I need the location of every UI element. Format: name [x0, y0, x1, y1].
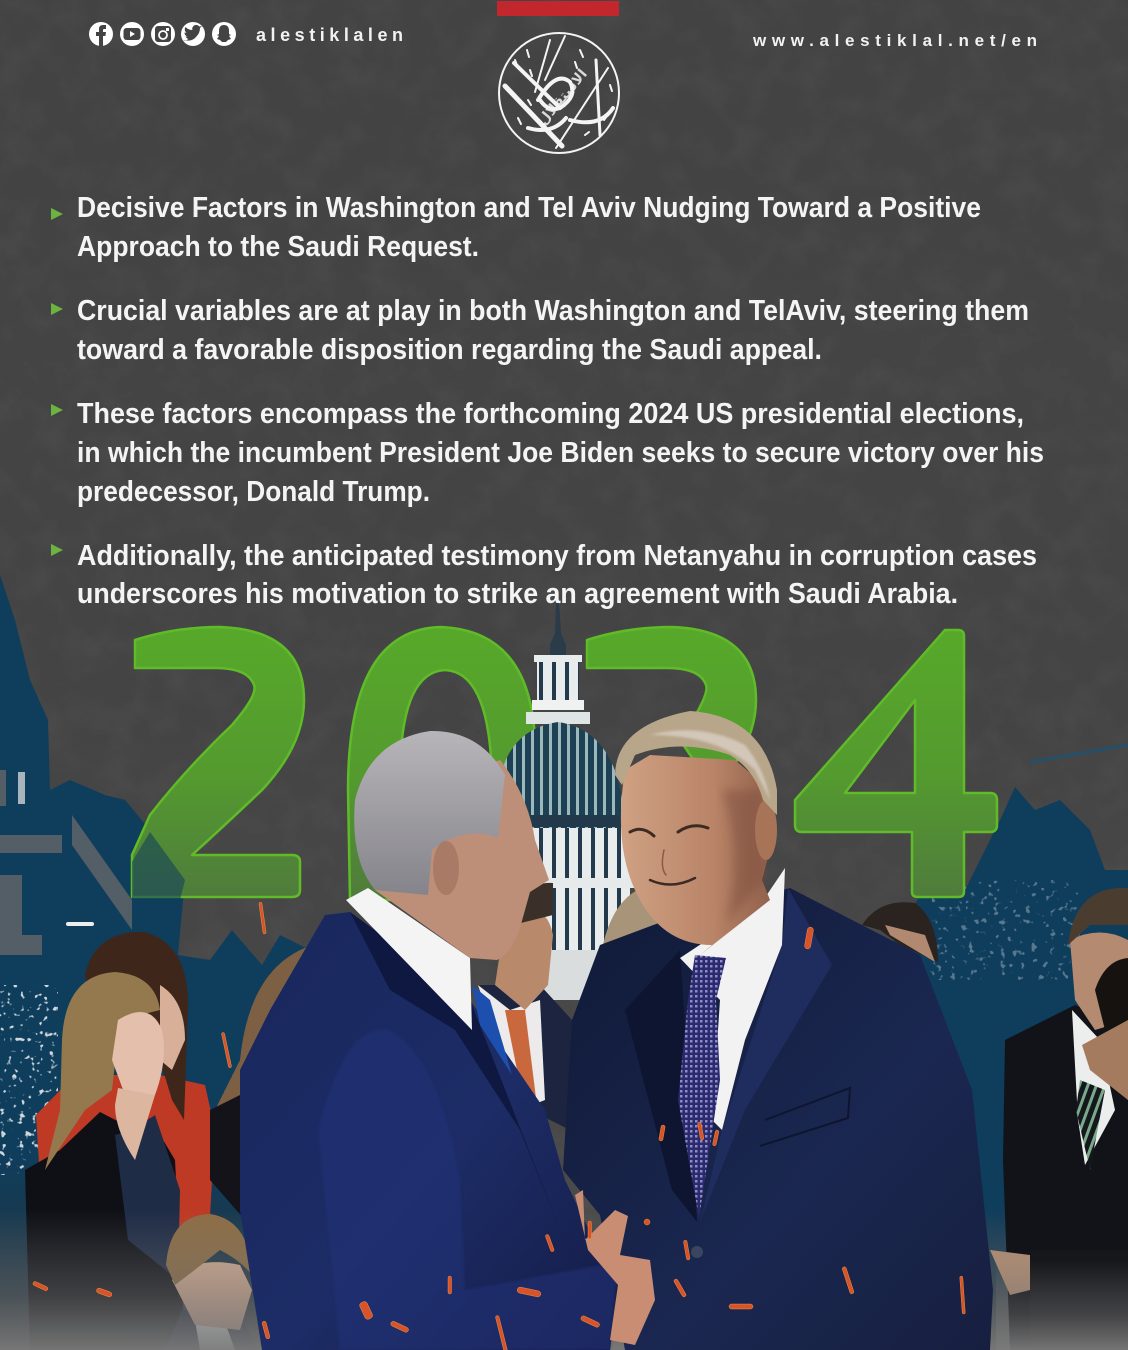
lower right fade — [996, 1260, 1128, 1350]
Biden lapels — [625, 950, 697, 1222]
background figure: girl in red top — [36, 932, 215, 1260]
bullet 4: Additionally, the anticipated testimony from Netanyahu in corruption cases — [77, 540, 1037, 572]
blue silhouette: trees right — [880, 745, 1128, 1350]
background figure: man in black suit far right — [1003, 888, 1128, 1350]
background figure: young boy — [165, 1214, 258, 1350]
red top bar — [497, 1, 619, 16]
social handle: alestiklalen — [256, 25, 403, 45]
background figure: man right behind Biden — [862, 902, 938, 962]
big green number 2024 — [132, 627, 997, 900]
icon: facebook — [89, 22, 113, 46]
Biden hair highlight — [650, 730, 770, 800]
Biden ear — [755, 800, 777, 860]
bullet 4 — [51, 540, 1037, 610]
Netanyahu lapel — [350, 912, 560, 1230]
left and lower background fade — [0, 1210, 1128, 1350]
Netanyahu ear — [433, 841, 459, 895]
background figure: man behind Netanyahu — [478, 883, 572, 1130]
Biden figure — [563, 711, 993, 1350]
Biden hair — [615, 711, 777, 815]
digit 2 second — [587, 627, 756, 790]
Netanyahu tie — [472, 985, 512, 1075]
logo: calligraphic roundel: الاستقلال — [535, 66, 591, 128]
digit 2 — [132, 627, 304, 897]
blue silhouette: church and trees left — [0, 575, 345, 1350]
Biden shirt and collar — [680, 868, 785, 1130]
bullet 2: toward a favorable disposition regarding the Saudi appeal. — [77, 334, 822, 366]
bullet list — [51, 192, 1044, 610]
bullet 3: These factors encompass the forthcoming 2024 US presidential elections, — [77, 398, 1024, 430]
digit 0 — [348, 627, 535, 900]
bullet 2 — [51, 295, 1029, 366]
header: social icons and handle — [89, 22, 403, 46]
icon: twitter — [181, 22, 205, 46]
capitol building — [498, 603, 637, 1000]
bullet 1 — [51, 192, 981, 263]
bullet 3: predecessor, Donald Trump. — [77, 476, 430, 508]
bullet 4: underscores his motivation to strike an agreement with Saudi Arabia. — [77, 578, 958, 610]
Biden face shading — [722, 790, 765, 925]
Netanyahu arm shading — [318, 1029, 618, 1350]
icon: youtube — [120, 22, 144, 46]
Biden facial features — [630, 826, 708, 885]
digit 4 — [795, 630, 997, 897]
Netanyahu hair — [354, 731, 505, 895]
Netanyahu neck and face — [375, 760, 549, 960]
background figure: woman far right with hand — [990, 958, 1128, 1350]
background figure: woman behind Netanyahu — [210, 943, 330, 1220]
Netanyahu suit — [240, 912, 618, 1350]
icon: snapchat — [212, 22, 236, 46]
bullet 1: Decisive Factors in Washington and Tel Aviv Nudging Toward a Positive — [77, 192, 981, 224]
Biden suit — [563, 888, 993, 1350]
Netanyahu figure — [240, 731, 655, 1350]
background figure: blonde head beside Biden — [600, 885, 665, 960]
Netanyahu collar — [346, 888, 472, 1030]
Biden tie — [678, 955, 726, 1218]
logo: calligraphic roundel — [499, 33, 619, 153]
flying orange sparks — [32, 902, 965, 1350]
Biden neck and face — [621, 755, 775, 955]
Netanyahu hand — [575, 1190, 655, 1345]
icon: instagram — [151, 22, 175, 46]
Biden button — [691, 1246, 703, 1258]
bullet 3: in which the incumbent President Joe Biden seeks to secure victory over his — [77, 437, 1044, 469]
background figure: blonde girl in dark cardigan — [25, 972, 185, 1350]
blue church wing over the foot of the 2 — [132, 832, 185, 900]
bullet 3 — [51, 398, 1044, 508]
bullet 1: Approach to the Saudi Request. — [77, 231, 479, 263]
Biden pocket — [760, 1088, 850, 1146]
bullet 2: Crucial variables are at play in both Washington and TelAviv, steering them — [77, 295, 1029, 327]
website address: www.alestiklal.net/en — [752, 31, 1037, 50]
